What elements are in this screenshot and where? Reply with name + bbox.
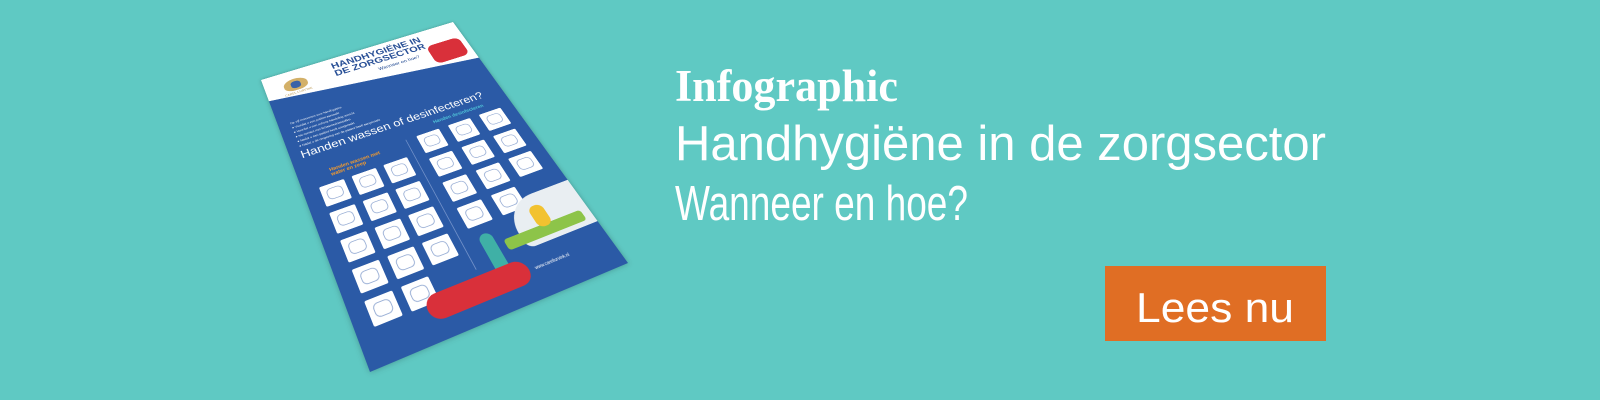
bullet list: ● Na contact met lichaamsvloeistoffen (295, 118, 351, 138)
red bubble top (426, 37, 470, 64)
label: Infographic: Infographic (675, 61, 898, 111)
poster mockup (261, 22, 628, 372)
poster subtitle: Wanneer en hoe? (377, 55, 421, 71)
bullet list: De vijf momenten voor handhygiëne (290, 106, 342, 125)
logo (284, 78, 313, 98)
illustration: care scene (479, 180, 598, 269)
website footer: www.carellurvink.nl (534, 252, 571, 271)
button: Lees nu: Lees nu (1136, 284, 1294, 331)
button: Lees nu (1105, 266, 1326, 341)
bullet list: ● Nadat u de omgeving van de patiënt heeft aangeraakt (299, 118, 381, 148)
bullet list: ● Voordat u een schone handeling verricht (293, 111, 355, 134)
subtitle line: Wanneer en hoe? (675, 177, 968, 231)
subheadings: Handen wassen met (329, 151, 381, 173)
right grid of steps (416, 108, 543, 229)
bullet list: ● Voordat u een patiënt aanraakt (292, 112, 340, 129)
bullet list: ● Nadat u een patiënt heeft aangeraakt (297, 122, 355, 143)
poster mockup: Handen desinfecteren (432, 104, 485, 125)
heading: Handen wassen of desinfecteren? (299, 90, 486, 161)
logo: CAREL LURVINK (285, 87, 313, 98)
left grid of steps (319, 157, 459, 327)
poster title: HANDHYGIËNE IN (330, 36, 423, 71)
divider (405, 140, 477, 270)
poster header (261, 22, 479, 102)
bullet list (290, 106, 381, 148)
poster title: DE ZORGSECTOR (333, 43, 427, 78)
subheadings: water en zeep (330, 161, 367, 177)
title line: Handhygiëne in de zorgsector (675, 117, 1326, 171)
red callout bottom (422, 258, 536, 323)
